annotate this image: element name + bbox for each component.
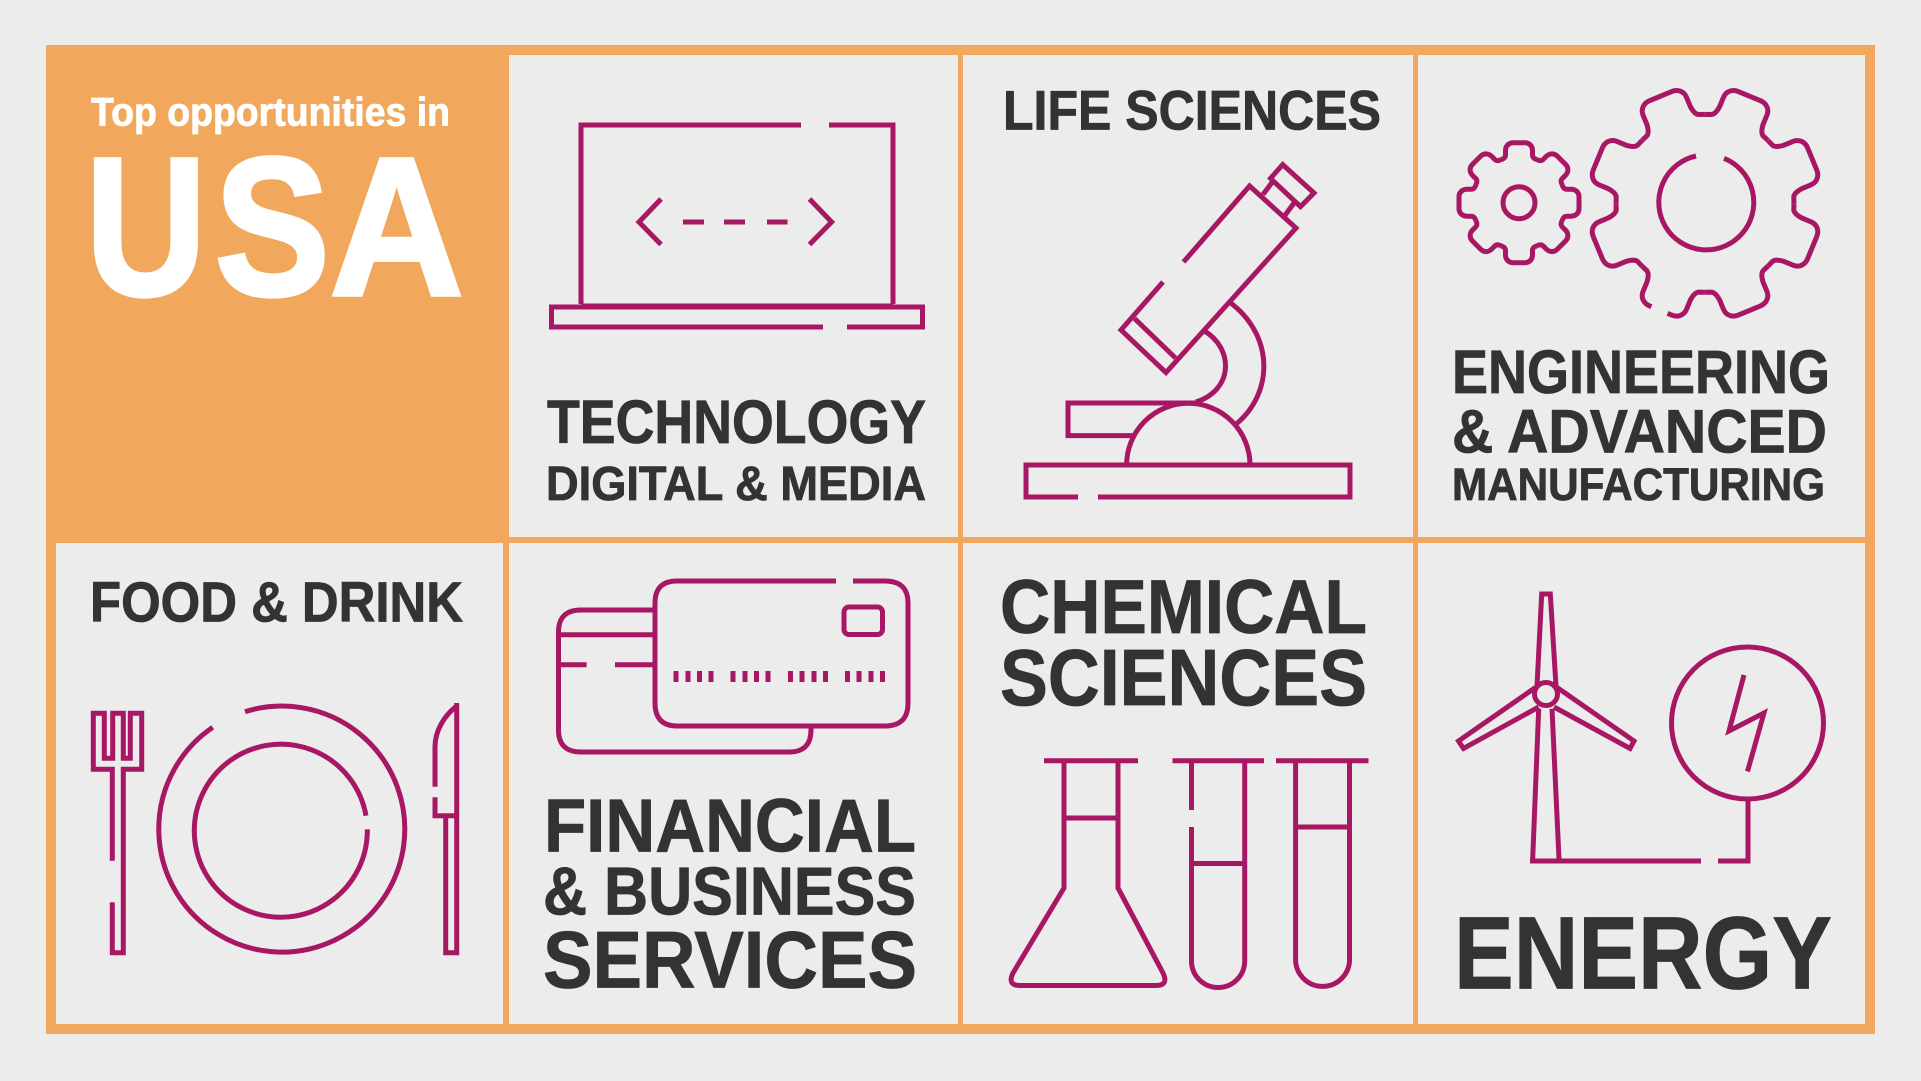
label: chemical sciences: CHEMICAL <box>1000 565 1367 650</box>
label: financial and business services: & BUSINESS <box>543 854 916 930</box>
panel: technology cell <box>509 55 958 537</box>
icon: credit cards <box>558 581 908 752</box>
icon: laptop <box>552 125 922 327</box>
panel: food cell <box>56 543 503 1024</box>
icon: flask and test tubes <box>1011 761 1368 988</box>
label: financial and business services: SERVICES <box>543 916 917 1006</box>
icon: gears <box>1459 83 1825 323</box>
label: technology: DIGITAL & MEDIA <box>546 458 926 511</box>
icon: wind turbine with power circle <box>1458 594 1824 861</box>
panel: energy cell <box>1418 543 1865 1024</box>
label: technology: TECHNOLOGY <box>547 388 926 456</box>
icon: plate <box>159 706 405 952</box>
label: energy: ENERGY <box>1454 896 1832 1010</box>
panel: financial cell <box>509 543 958 1024</box>
label: technology <box>546 388 926 511</box>
heading: USA: U <box>86 117 206 337</box>
panel: engineering cell <box>1418 55 1865 537</box>
label: engineering: ENGINEERING <box>1452 338 1830 406</box>
icon: microscope <box>1026 165 1350 497</box>
label: chemical sciences: SCIENCES <box>1000 633 1367 722</box>
icon: knife <box>435 703 457 953</box>
label: life sciences: LIFE SCIENCES <box>1003 78 1381 142</box>
icon: fork <box>93 713 142 953</box>
label: engineering <box>1452 338 1830 510</box>
label: financial and business services <box>543 784 917 1006</box>
heading: USA: A <box>330 117 464 337</box>
label: chemical sciences <box>1000 565 1367 722</box>
label: food and drink: FOOD & DRINK <box>90 570 463 634</box>
heading: USA <box>86 117 464 337</box>
panel: chemical cell <box>963 543 1413 1024</box>
label: engineering: MANUFACTURING <box>1452 459 1825 510</box>
heading: USA: S <box>215 117 330 337</box>
panel: life sciences cell <box>963 55 1413 537</box>
label: engineering: & ADVANCED <box>1452 398 1827 466</box>
label: financial and business services: FINANCIAL <box>544 784 916 868</box>
heading: top opportunities: Top opportunities in <box>91 90 450 134</box>
